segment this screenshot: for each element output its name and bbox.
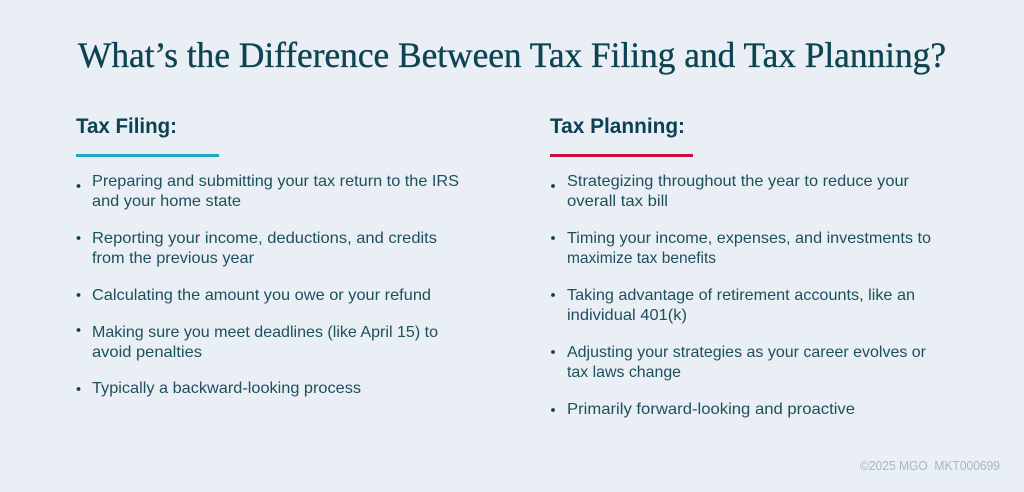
bullet item: backward-looking: Typically a backward-looking process — [92, 380, 361, 397]
bullet item: retirement accounts: Taking advantage of retirement accounts, like an — [567, 287, 915, 304]
bullet item: strategizing: overall tax bill — [567, 193, 668, 210]
list: tax filing points — [77, 173, 459, 397]
bullet item: preparing: Preparing and submitting your tax return to the IRS — [92, 173, 459, 190]
bullet item: deadlines: avoid penalties — [92, 344, 202, 361]
bullet item: deadlines — [77, 324, 438, 361]
bullet item: adjusting: tax laws change — [567, 364, 681, 381]
panel: tax filing — [76, 115, 459, 397]
bullet item: reporting: Reporting your income, deductions, and credits — [92, 230, 437, 247]
bullet item: retirement accounts — [551, 287, 915, 324]
heading: tax filing: Tax Filing: — [76, 115, 177, 138]
bullet item: timing — [551, 230, 931, 267]
bullet item: reporting — [77, 230, 437, 267]
panel: tax planning — [550, 115, 931, 418]
list: tax planning points — [551, 173, 931, 418]
bullet item: preparing: and your home state — [92, 193, 241, 210]
bullet item: retirement accounts: individual 401(k) — [567, 307, 687, 324]
title: What’s the Difference Between Tax Filing and Tax Planning? — [78, 35, 946, 75]
bullet item: forward-looking: Primarily forward-looking and proactive — [567, 401, 855, 418]
bullet item: timing: Timing your income, expenses, and investments to — [567, 230, 931, 247]
bullet item: deadlines: Making sure you meet deadlines (like April 15) to — [92, 324, 438, 341]
bullet item: adjusting — [551, 344, 927, 381]
heading: tax planning: Tax Planning: — [550, 115, 685, 138]
bullet item: strategizing: Strategizing throughout the year to reduce your — [567, 173, 910, 190]
bullet item: timing: maximize tax benefits — [567, 250, 716, 267]
bullet item: preparing — [77, 173, 459, 210]
teal underline — [76, 154, 219, 157]
bullet item: adjusting: Adjusting your strategies as your career evolves or — [567, 344, 927, 361]
red underline — [550, 154, 693, 157]
bullet item: strategizing — [551, 173, 910, 210]
bullet item: calculating: Calculating the amount you owe or your refund — [92, 287, 431, 304]
bullet item: reporting: from the previous year — [92, 250, 255, 267]
footer copyright: ©2025 MGO MKT000699 — [860, 458, 1000, 473]
